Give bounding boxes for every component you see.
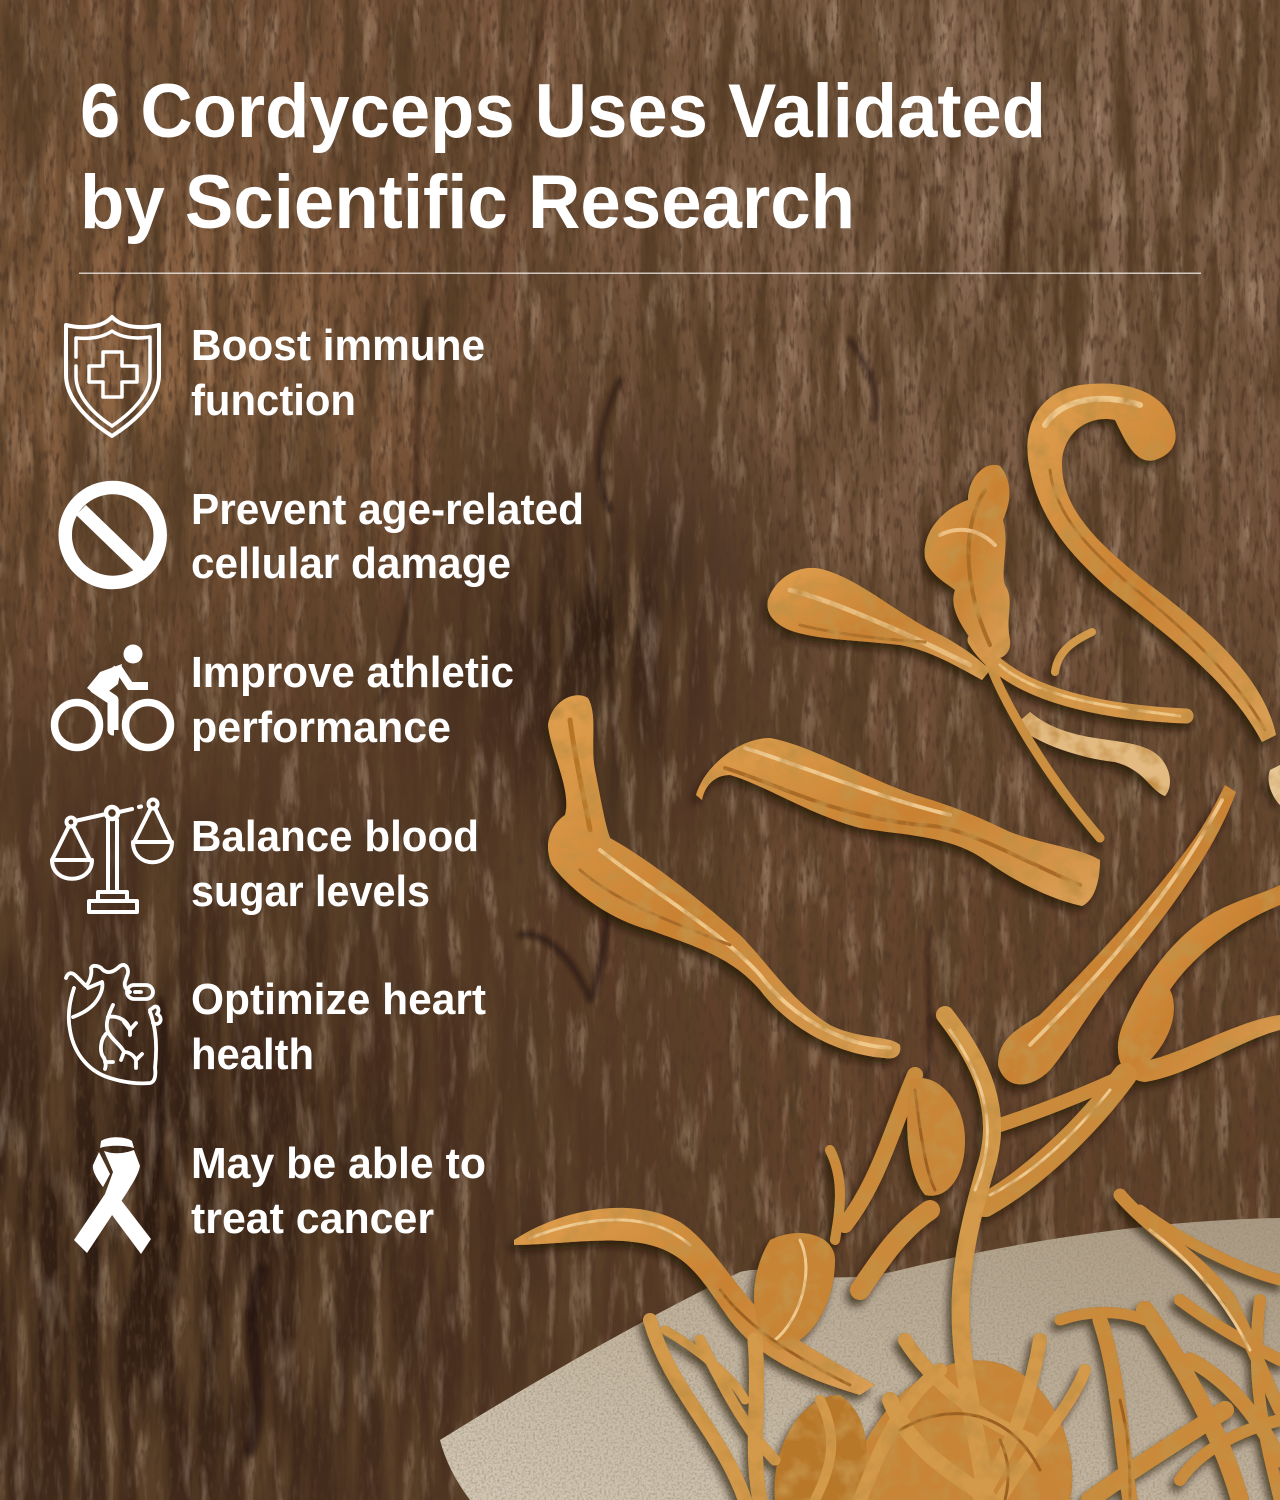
text: boost immune function: Boost immune bbox=[191, 321, 485, 370]
mushroom: left long stalk bbox=[548, 695, 900, 1058]
cloth sack bbox=[440, 1218, 1280, 1500]
mushroom: left-pointing head bbox=[768, 568, 990, 680]
dried cordyceps mushrooms bbox=[514, 383, 1280, 1500]
item 2: prevent age-related cellular damage bbox=[65, 485, 584, 588]
title: 6 Cordyceps Uses Validated bbox=[80, 69, 1046, 154]
text: improve athletic performance: Improve athletic bbox=[191, 648, 514, 697]
text: may be able to treat cancer: May be able to bbox=[191, 1139, 486, 1188]
icon: shield with cross bbox=[66, 317, 159, 436]
item 1: boost immune function bbox=[66, 317, 485, 436]
item 5: optimize heart health bbox=[66, 965, 486, 1083]
text: prevent age-related cellular damage: cellular damage bbox=[191, 539, 511, 588]
mushroom: middle long stalk bbox=[696, 738, 1100, 906]
text: optimize heart health: Optimize heart bbox=[191, 975, 486, 1024]
title: by Scientific Research bbox=[80, 160, 855, 245]
mushroom: bottom cluster bbox=[514, 1015, 1280, 1500]
text: may be able to treat cancer: treat cancer bbox=[191, 1194, 434, 1243]
icon: anatomical heart bbox=[66, 965, 161, 1083]
title bbox=[80, 69, 1046, 245]
item 3: improve athletic performance bbox=[54, 644, 514, 752]
mushroom: right lower stalks bbox=[998, 765, 1280, 1084]
text: balance blood sugar levels: sugar levels bbox=[191, 867, 430, 916]
icon: cyclist bbox=[54, 644, 170, 748]
text: optimize heart health: health bbox=[191, 1030, 314, 1079]
text: improve athletic performance: performance bbox=[191, 703, 451, 752]
icon: awareness ribbon bbox=[74, 1137, 151, 1254]
mushroom: top right hook bbox=[1027, 383, 1276, 742]
icon: balance scale bbox=[52, 800, 172, 912]
text: boost immune function: function bbox=[191, 376, 356, 425]
item 6: may be able to treat cancer bbox=[74, 1137, 486, 1254]
item 4: balance blood sugar levels bbox=[52, 800, 479, 916]
text: balance blood sugar levels: Balance blood bbox=[191, 812, 479, 861]
icon: prohibition sign bbox=[65, 488, 160, 582]
text: prevent age-related cellular damage: Prevent age-related bbox=[191, 485, 584, 534]
mushroom: upper centre stalks bbox=[925, 465, 1186, 838]
